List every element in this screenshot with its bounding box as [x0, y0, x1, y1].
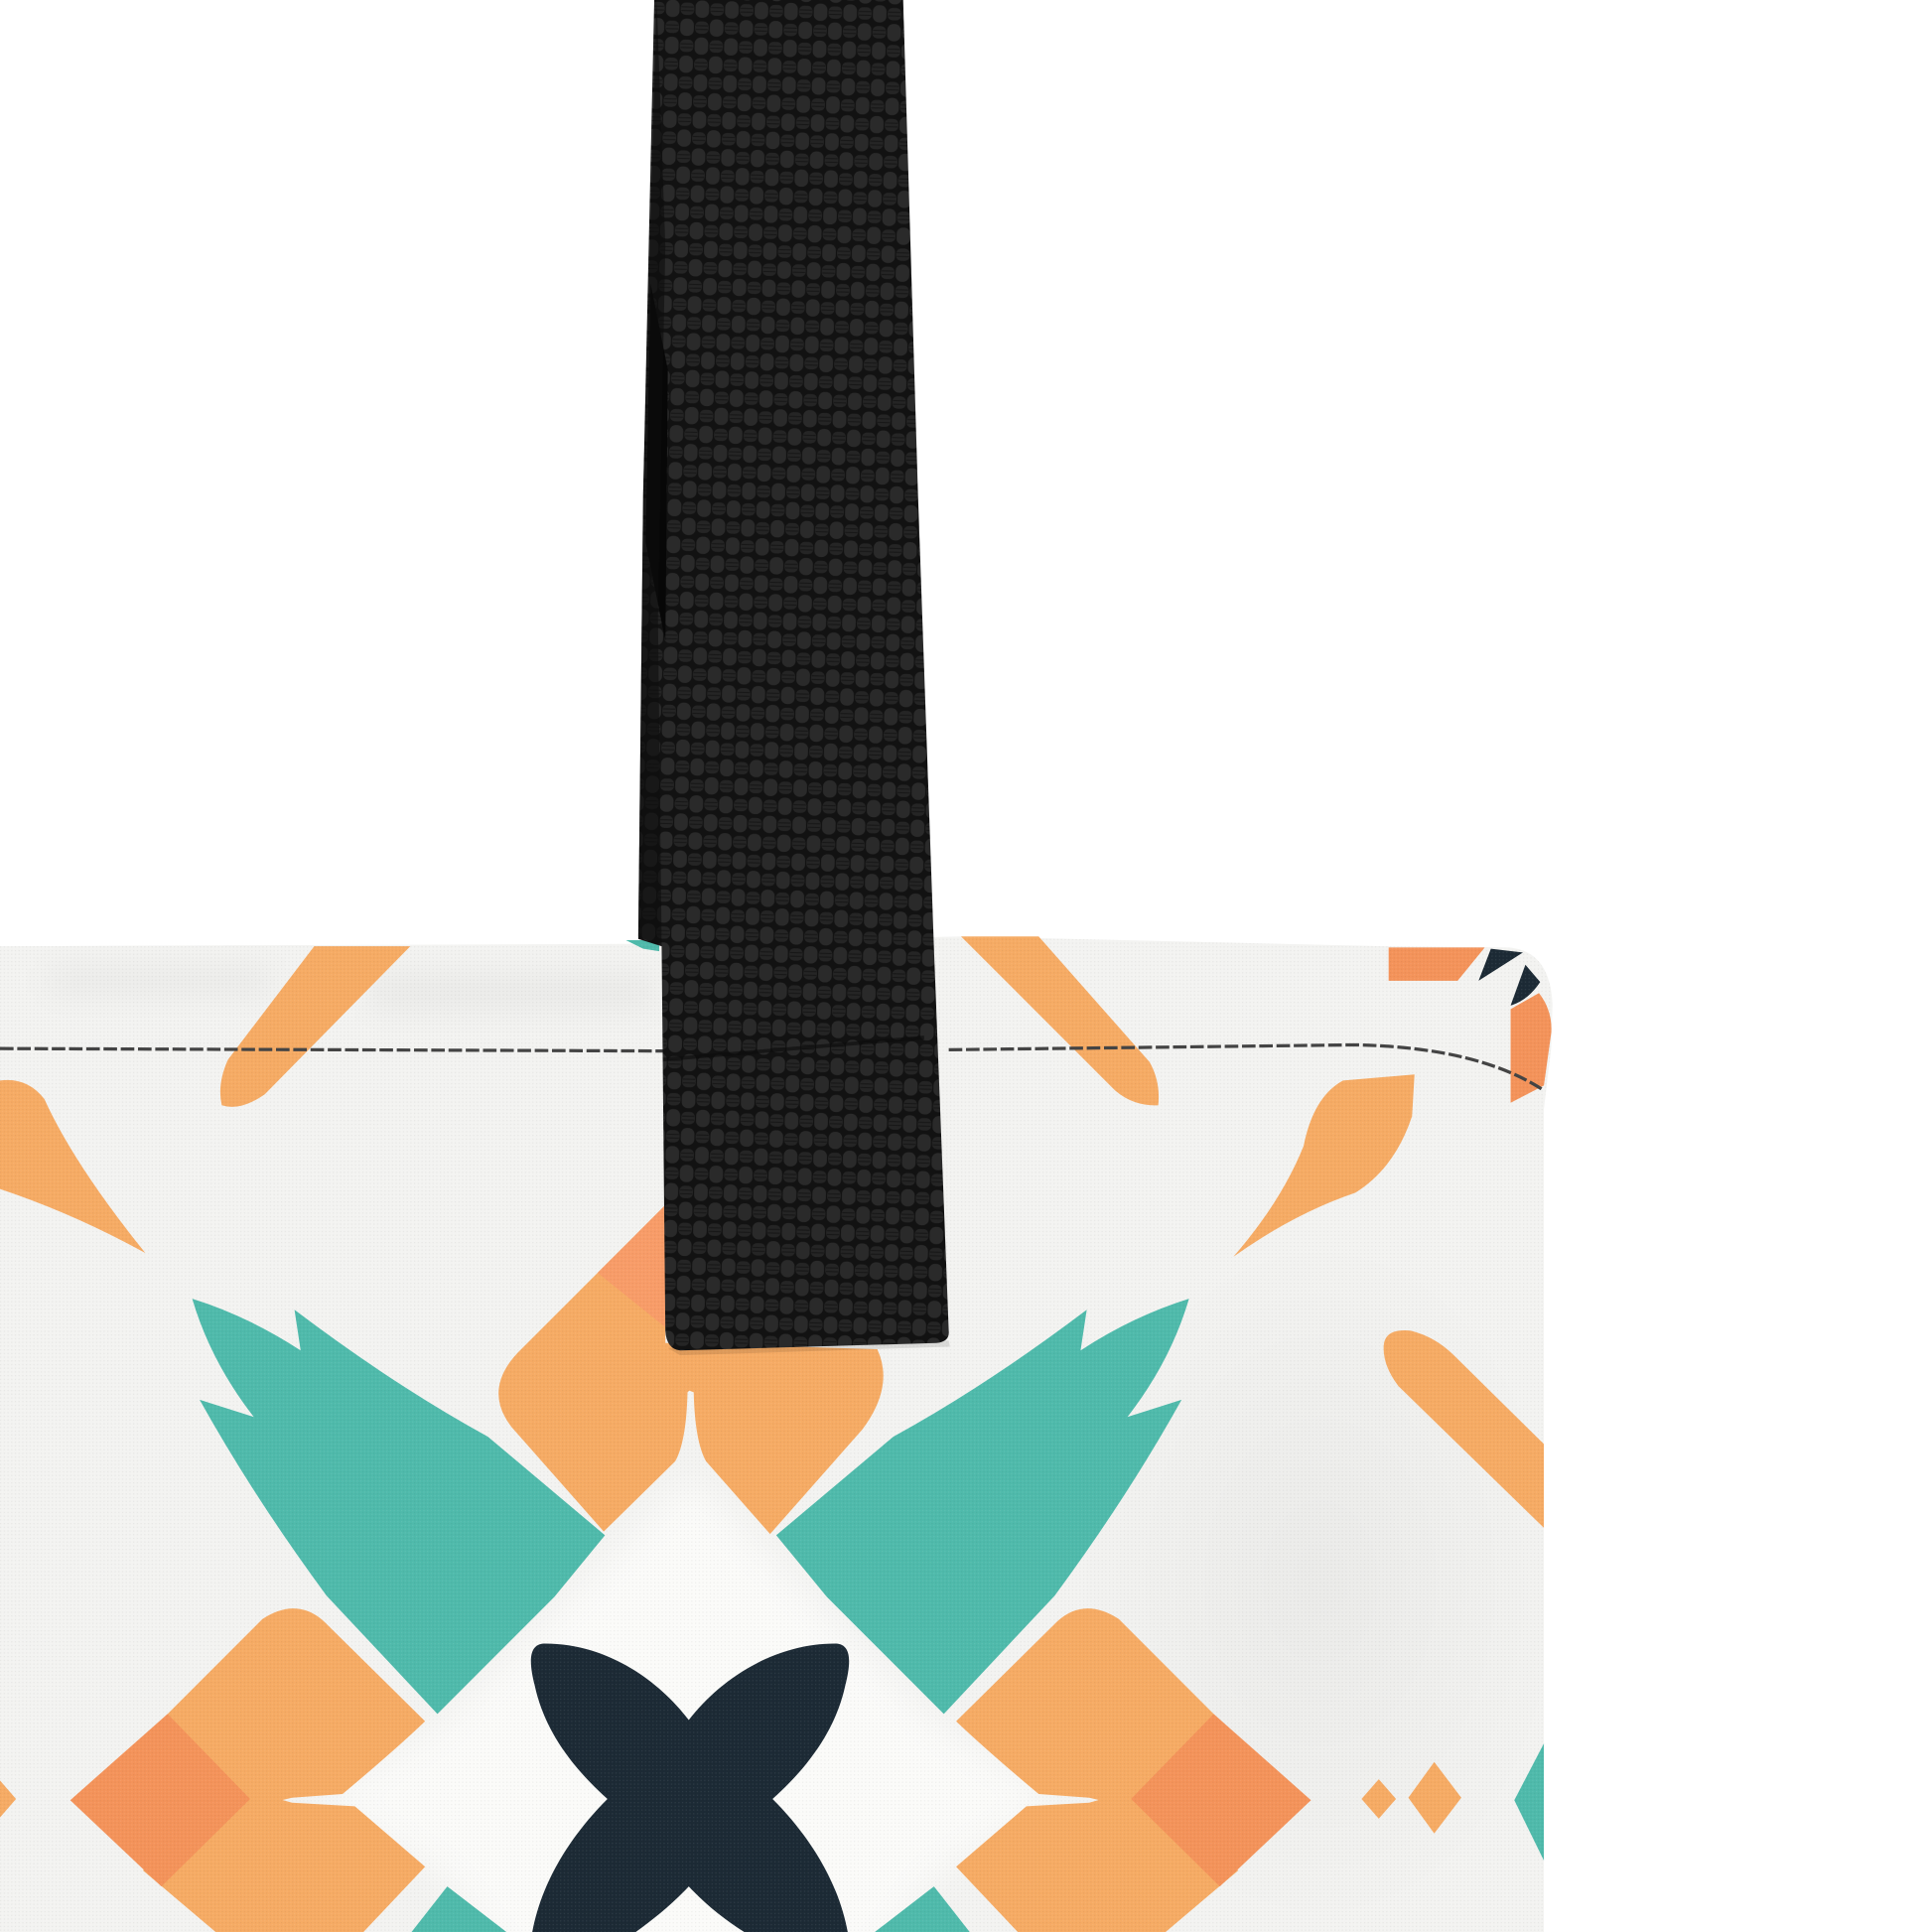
strap shadow on bag: [668, 1340, 950, 1355]
pattern: right teal wing: [776, 1299, 1189, 1714]
pattern: centre orange heart: [498, 1204, 884, 1534]
pattern: left deep orange square: [70, 1714, 250, 1886]
pattern: left orange leaf: [0, 1080, 145, 1253]
pattern: right orange petals: [956, 1608, 1238, 1932]
pattern: right edge teal fragment: [1514, 1743, 1544, 1861]
pattern: small orange diamonds: [0, 1762, 1461, 1834]
pattern: right orange leaf: [1233, 1074, 1415, 1257]
teal sliver at bag top: [625, 940, 659, 951]
pattern: bottom right teal fragment: [875, 1886, 970, 1932]
pattern: navy cross: [531, 1644, 849, 1932]
fabric fold shading: [50, 967, 1544, 1932]
black woven strap: [638, 0, 949, 1350]
pattern: left orange petals: [143, 1608, 425, 1932]
pattern: right deep orange square: [1131, 1714, 1311, 1886]
pattern: top right orange bar: [961, 936, 1159, 1105]
canvas texture: [0, 936, 1553, 1932]
pattern: left teal wing: [193, 1299, 605, 1714]
pattern: top left orange bar: [220, 946, 410, 1107]
pattern: top right corner fragments: [1389, 947, 1552, 1103]
tote bag body: [0, 936, 1553, 1932]
stitching line: [0, 1044, 1544, 1090]
pattern: right orange bar: [1384, 1330, 1544, 1528]
pattern: bottom left teal fragment: [412, 1886, 506, 1932]
